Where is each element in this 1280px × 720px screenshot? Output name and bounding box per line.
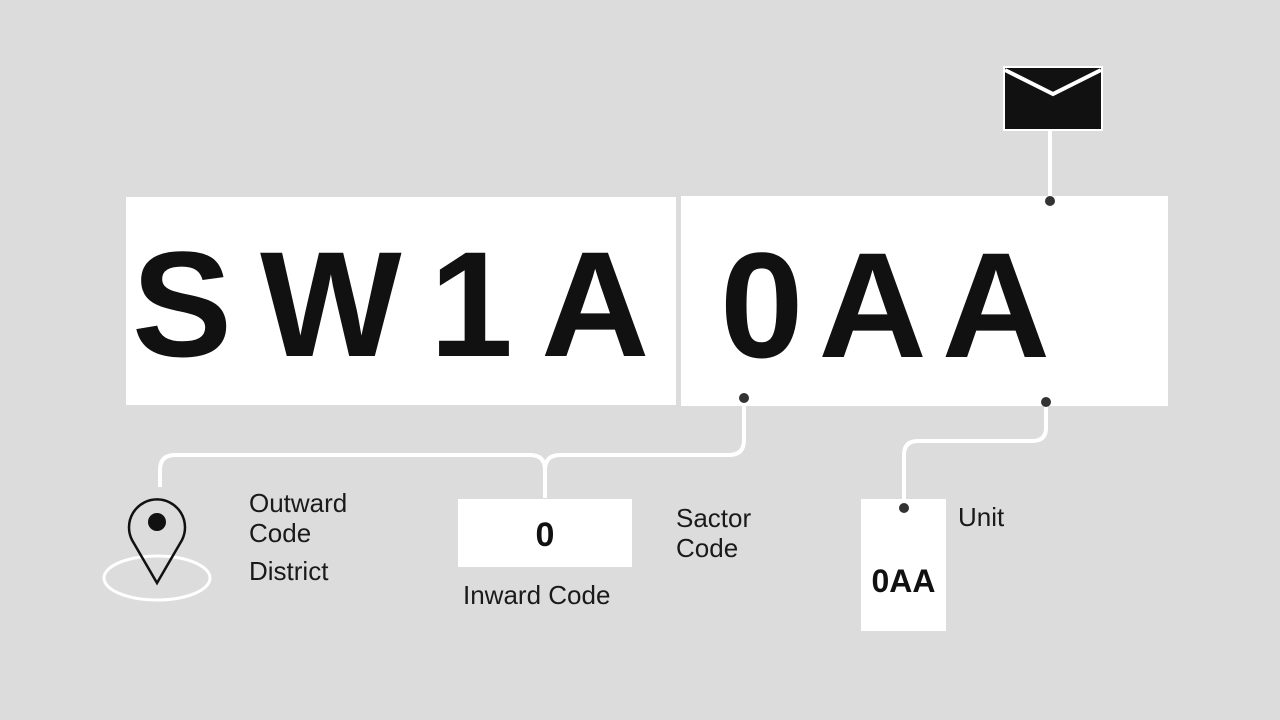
unit box bbox=[861, 499, 946, 631]
outward code label: District bbox=[249, 556, 328, 586]
outward code label: Code bbox=[249, 518, 311, 548]
sector code label: Code bbox=[676, 533, 738, 563]
sector box bbox=[458, 499, 632, 567]
outward code box: SW1A bbox=[132, 220, 677, 388]
outward code label bbox=[249, 488, 347, 586]
sector code label: Sactor bbox=[676, 503, 751, 533]
inward code label: Inward Code bbox=[463, 580, 610, 610]
icon: location pin bbox=[102, 498, 212, 602]
inward code box: 0AA bbox=[720, 221, 1065, 389]
unit label: Unit bbox=[958, 502, 1004, 532]
unit box: 0AA bbox=[871, 563, 936, 599]
sector code label bbox=[676, 503, 751, 563]
outward code label: Outward bbox=[249, 488, 347, 518]
icon: envelope bbox=[1003, 66, 1103, 131]
sector box: 0 bbox=[536, 516, 554, 554]
inward code box bbox=[681, 196, 1168, 406]
